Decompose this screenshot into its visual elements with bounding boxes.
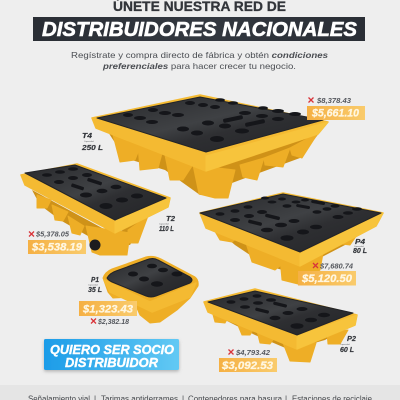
price: T4 xyxy=(307,96,365,120)
intro text xyxy=(71,50,328,71)
price: P4 xyxy=(298,262,356,286)
price: P2 xyxy=(219,348,277,372)
price: P2: $4,793.42 xyxy=(235,348,271,357)
price: P4: $5,120.50 xyxy=(301,273,353,285)
label: T4 xyxy=(81,131,103,152)
icon: drain cap xyxy=(90,240,100,250)
footer text xyxy=(28,394,373,400)
intro text: Regístrate y compra directo de fábrica y obtén condiciones xyxy=(71,50,328,60)
label: T2: T2 xyxy=(166,214,176,223)
price: P1 xyxy=(79,301,137,326)
product: P1 pallet xyxy=(103,256,198,323)
price: T4: $5,661.10 xyxy=(311,108,360,120)
label: T4: T4 xyxy=(82,131,93,140)
label: T2: 110 L xyxy=(159,224,174,233)
price: P4: $7,680.74 xyxy=(319,262,354,270)
label: T2 xyxy=(159,214,176,233)
label: P2: 60 L xyxy=(340,345,354,354)
label: P4 xyxy=(353,237,367,255)
product: P4 pallet xyxy=(200,193,383,285)
heading banner: DISTRIBUIDORES NACIONALES xyxy=(42,19,358,41)
call-to-action button: DISTRIBUIDOR xyxy=(65,355,159,370)
call-to-action button xyxy=(44,339,179,370)
label: P4: Capacidad xyxy=(354,246,364,248)
price: P1: $2,382.18 xyxy=(97,317,130,326)
price: P2: $3,092.53 xyxy=(221,360,273,372)
footer band xyxy=(0,385,400,400)
price: P1: $1,323.43 xyxy=(82,304,133,316)
label: T2: Capacidad xyxy=(159,224,169,226)
label: P2: P2 xyxy=(347,334,357,343)
label: P1: P1 xyxy=(91,275,99,284)
label: T4: 250 L xyxy=(81,143,103,152)
product: T4 pallet xyxy=(92,95,328,198)
label: P1: Capacidad xyxy=(88,284,98,286)
label: P4: P4 xyxy=(355,237,366,246)
price: T2: $3,538.19 xyxy=(31,242,83,254)
product: P2 pallet xyxy=(204,289,357,362)
label: P2 xyxy=(340,334,357,354)
intro text: preferenciales para hacer crecer tu negocio. xyxy=(102,61,296,71)
call-to-action button: QUIERO SER SOCIO xyxy=(50,342,174,357)
label: P2: Capacidad xyxy=(340,344,350,346)
price: T2: $5,378.05 xyxy=(35,230,70,238)
label: P1 xyxy=(88,275,102,294)
price: T4: $8,378.43 xyxy=(316,96,352,105)
label: T4: Capacidad xyxy=(84,141,94,143)
product: T2 pallet xyxy=(21,164,170,255)
label: P1: 35 L xyxy=(88,285,102,294)
price: T2 xyxy=(28,230,86,254)
label: P4: 80 L xyxy=(353,246,367,255)
